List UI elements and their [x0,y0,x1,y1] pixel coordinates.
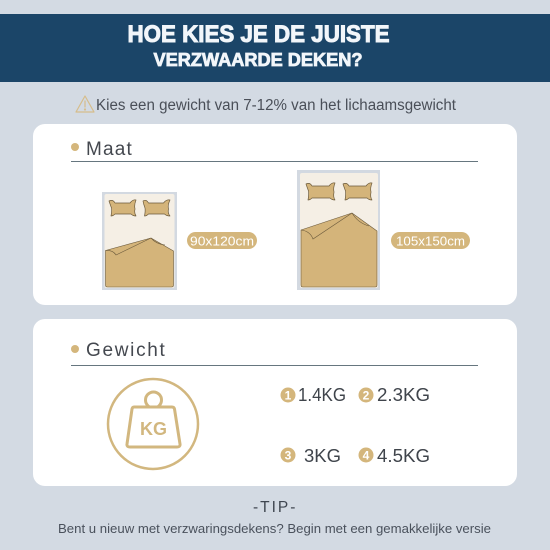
weight option: 3KG: 3KG [304,446,341,466]
weight option: 4.5KG: 4.5KG [377,446,430,466]
size label: 105x150cm: 105x150cm [396,234,465,248]
icon: warning triangle [76,96,94,112]
title line 2: VERZWAARDE DEKEN? [154,50,362,70]
bed: 90x120 [102,192,177,290]
pillows [109,200,170,216]
heading: gewicht [71,340,478,366]
weight advice line [76,96,457,114]
weight option: 3KG [280,446,341,466]
pillows [306,183,372,200]
panel: maat [33,124,517,305]
weight option: 4.5KG: 4 [363,448,370,462]
weight option: 3KG: 3 [285,448,292,462]
heading: maat [71,139,478,162]
heading: gewicht: Gewicht [86,340,167,361]
icon: kg weight: KG [140,419,167,439]
weight option: 1.4KG: 1 [285,388,292,402]
blanket [301,213,377,287]
weight option: 2.3KG: 2 [363,388,370,402]
title line 1: HOE KIES JE DE JUISTE [128,21,390,48]
blanket [106,238,174,287]
panel: gewicht [33,319,517,486]
advice text: Kies een gewicht van 7-12% van het lichaamsgewicht [96,97,457,114]
size label: 90x120cm: 90x120cm [190,234,254,248]
header banner [0,14,550,82]
tip text: Bent u nieuw met verzwaringsdekens? Begin met een gemakkelijke versie [58,521,491,536]
icon: kg weight [108,379,198,469]
weight option: 2.3KG: 2.3KG [377,385,430,405]
heading: maat: Maat [86,139,133,160]
bed: 105x150 [297,170,380,290]
weight option: 1.4KG: 1.4KG [298,385,346,405]
tip heading: -TIP- [253,499,297,516]
